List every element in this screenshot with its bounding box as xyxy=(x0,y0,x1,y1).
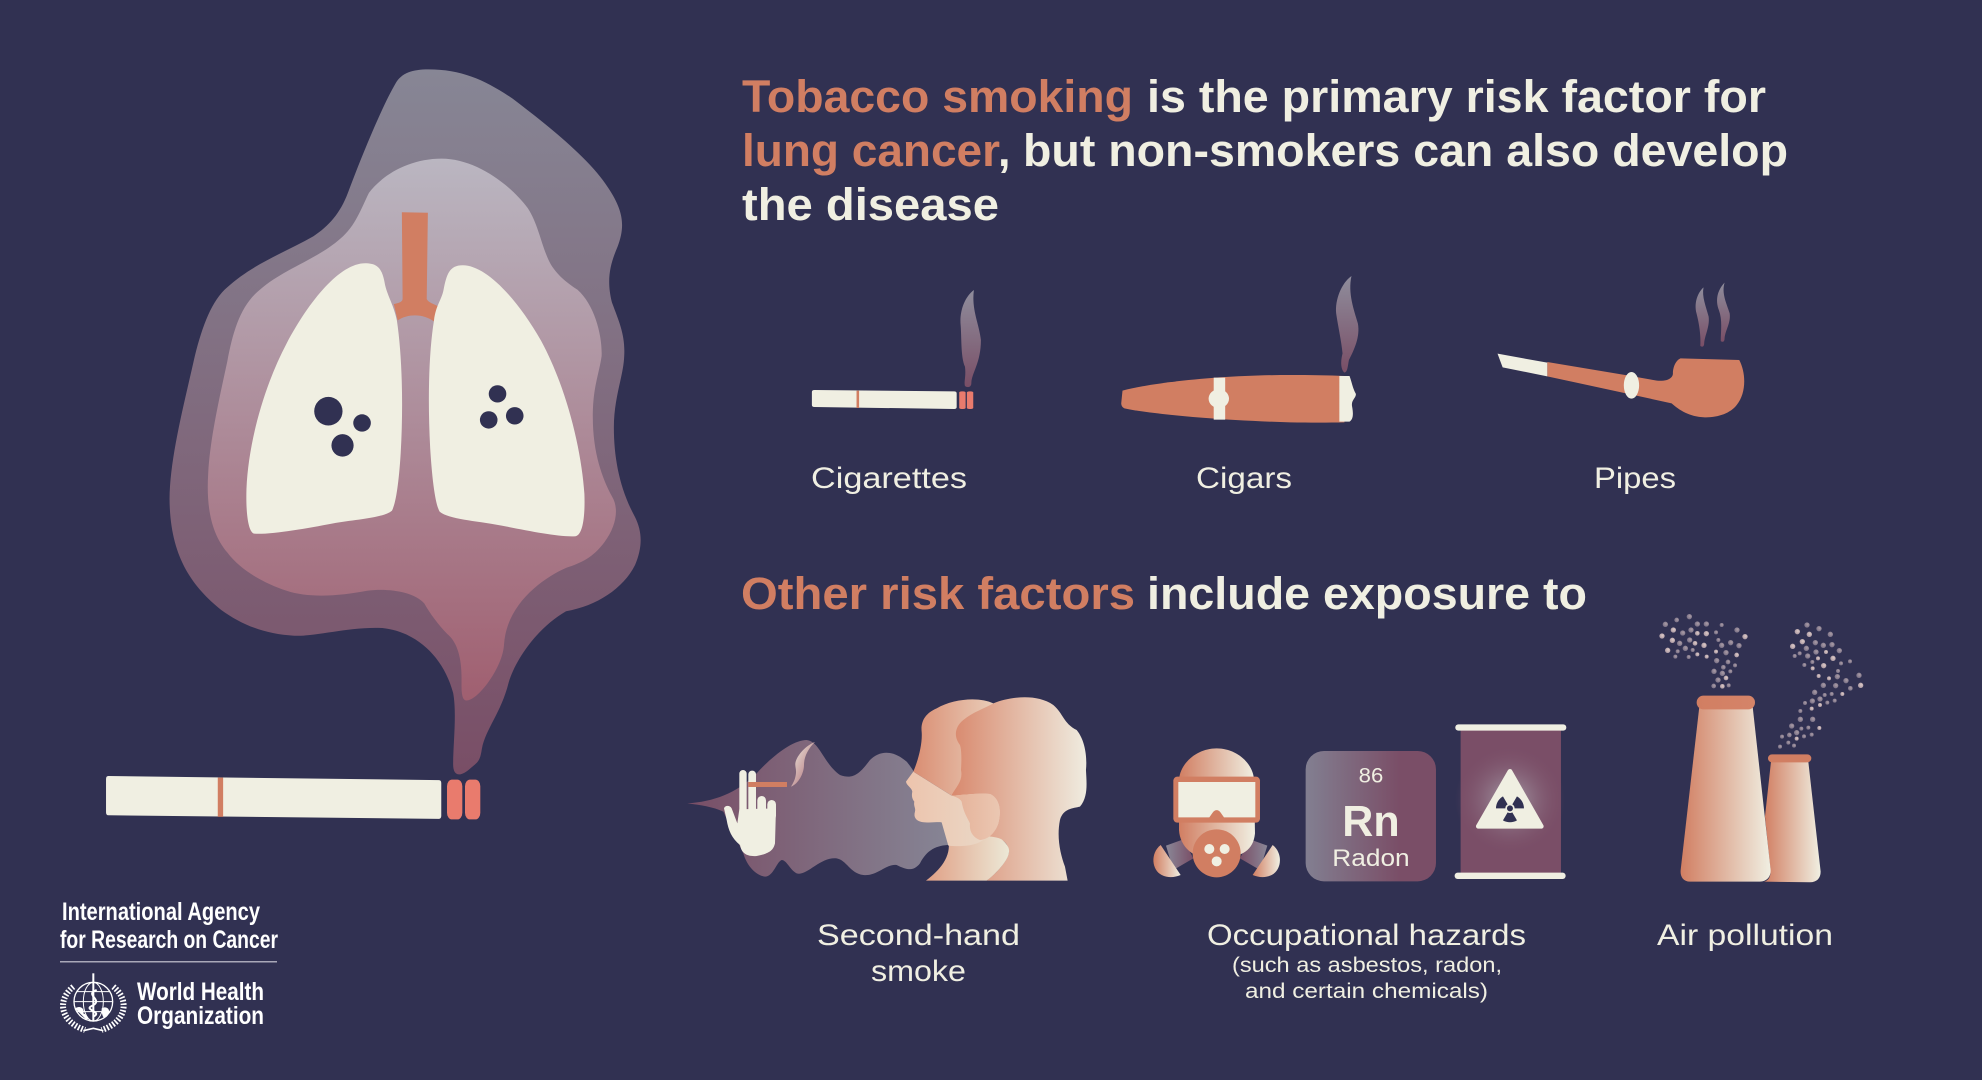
icon: pipe xyxy=(1498,283,1744,417)
subheading: Other risk factors xyxy=(741,568,1135,619)
radon element tile: Rn xyxy=(1342,797,1400,846)
subheading: include exposure to xyxy=(1147,568,1587,619)
large chimney cap xyxy=(1697,696,1755,709)
outer smoke cloud xyxy=(170,69,641,774)
radon element tile: Radon xyxy=(1332,845,1410,872)
label: occupational hazards: and certain chemicals) xyxy=(1245,980,1488,1003)
brighter particles xyxy=(1659,627,1863,741)
icon: cigarette xyxy=(812,290,981,409)
trachea xyxy=(394,212,438,321)
left lung xyxy=(246,263,402,534)
label: second-hand smoke: Second-hand xyxy=(817,919,1020,952)
label: occupational hazards: Occupational hazards xyxy=(1207,919,1526,952)
jaw and neck overlap xyxy=(906,772,1000,846)
radioactive barrel xyxy=(1455,724,1566,879)
smoke wisp xyxy=(791,742,815,787)
WHO emblem xyxy=(63,973,124,1031)
label: occupational hazards: (such as asbestos, radon, xyxy=(1232,954,1502,977)
inner smoke cloud xyxy=(208,159,616,701)
large cigarette xyxy=(106,776,480,819)
WHO name xyxy=(137,978,264,1030)
tobacco products icons xyxy=(812,276,1744,423)
label: second-hand smoke xyxy=(817,919,1020,988)
hand holding cigarette xyxy=(724,770,787,856)
subheading xyxy=(741,568,1587,619)
icons: occupational hazards xyxy=(1153,724,1566,881)
small chimney xyxy=(1764,762,1821,882)
headline xyxy=(742,71,1788,230)
headline: Tobacco smoking xyxy=(742,71,1133,122)
headline: lung cancer xyxy=(742,125,1000,176)
smoke cloud xyxy=(687,740,950,877)
IARC name: International Agency xyxy=(62,898,260,926)
headline: the disease xyxy=(742,179,999,230)
label: air pollution: Air pollution xyxy=(1657,919,1833,952)
IARC name: for Research on Cancer xyxy=(60,926,278,954)
icon: gas mask worker xyxy=(1153,748,1280,877)
radon element tile: 86 xyxy=(1359,763,1383,787)
tumours xyxy=(314,385,524,457)
icon: second-hand smoke xyxy=(687,697,1087,881)
headline: but non-smokers can also develop xyxy=(1023,125,1788,176)
label: occupational hazards xyxy=(1207,919,1526,1003)
large chimney xyxy=(1681,707,1771,882)
icon: cigar xyxy=(1121,276,1358,423)
illustration: smoke-filled lungs above cigarette xyxy=(106,69,641,819)
headline: , xyxy=(998,125,1011,176)
small chimney cap xyxy=(1768,754,1811,762)
IARC name xyxy=(60,898,278,954)
shoulder: person one xyxy=(926,836,1009,881)
WHO name: World Health xyxy=(137,978,264,1006)
label: pipes: Pipes xyxy=(1594,462,1676,495)
head: person two xyxy=(952,697,1087,881)
second jaw xyxy=(952,794,1000,840)
headline: is the primary risk factor for xyxy=(1147,71,1766,122)
label: second-hand smoke: smoke xyxy=(871,955,966,988)
pollution particles xyxy=(1663,614,1862,749)
head: person one xyxy=(913,699,1013,796)
label: cigars: Cigars xyxy=(1196,462,1292,495)
label: cigarettes: Cigarettes xyxy=(811,462,967,495)
WHO name: Organization xyxy=(137,1002,264,1030)
logos: IARC and WHO xyxy=(60,898,278,1031)
radon element tile xyxy=(1306,751,1436,881)
icon: factory chimneys with air pollution xyxy=(1659,614,1863,882)
right lung xyxy=(429,265,585,536)
